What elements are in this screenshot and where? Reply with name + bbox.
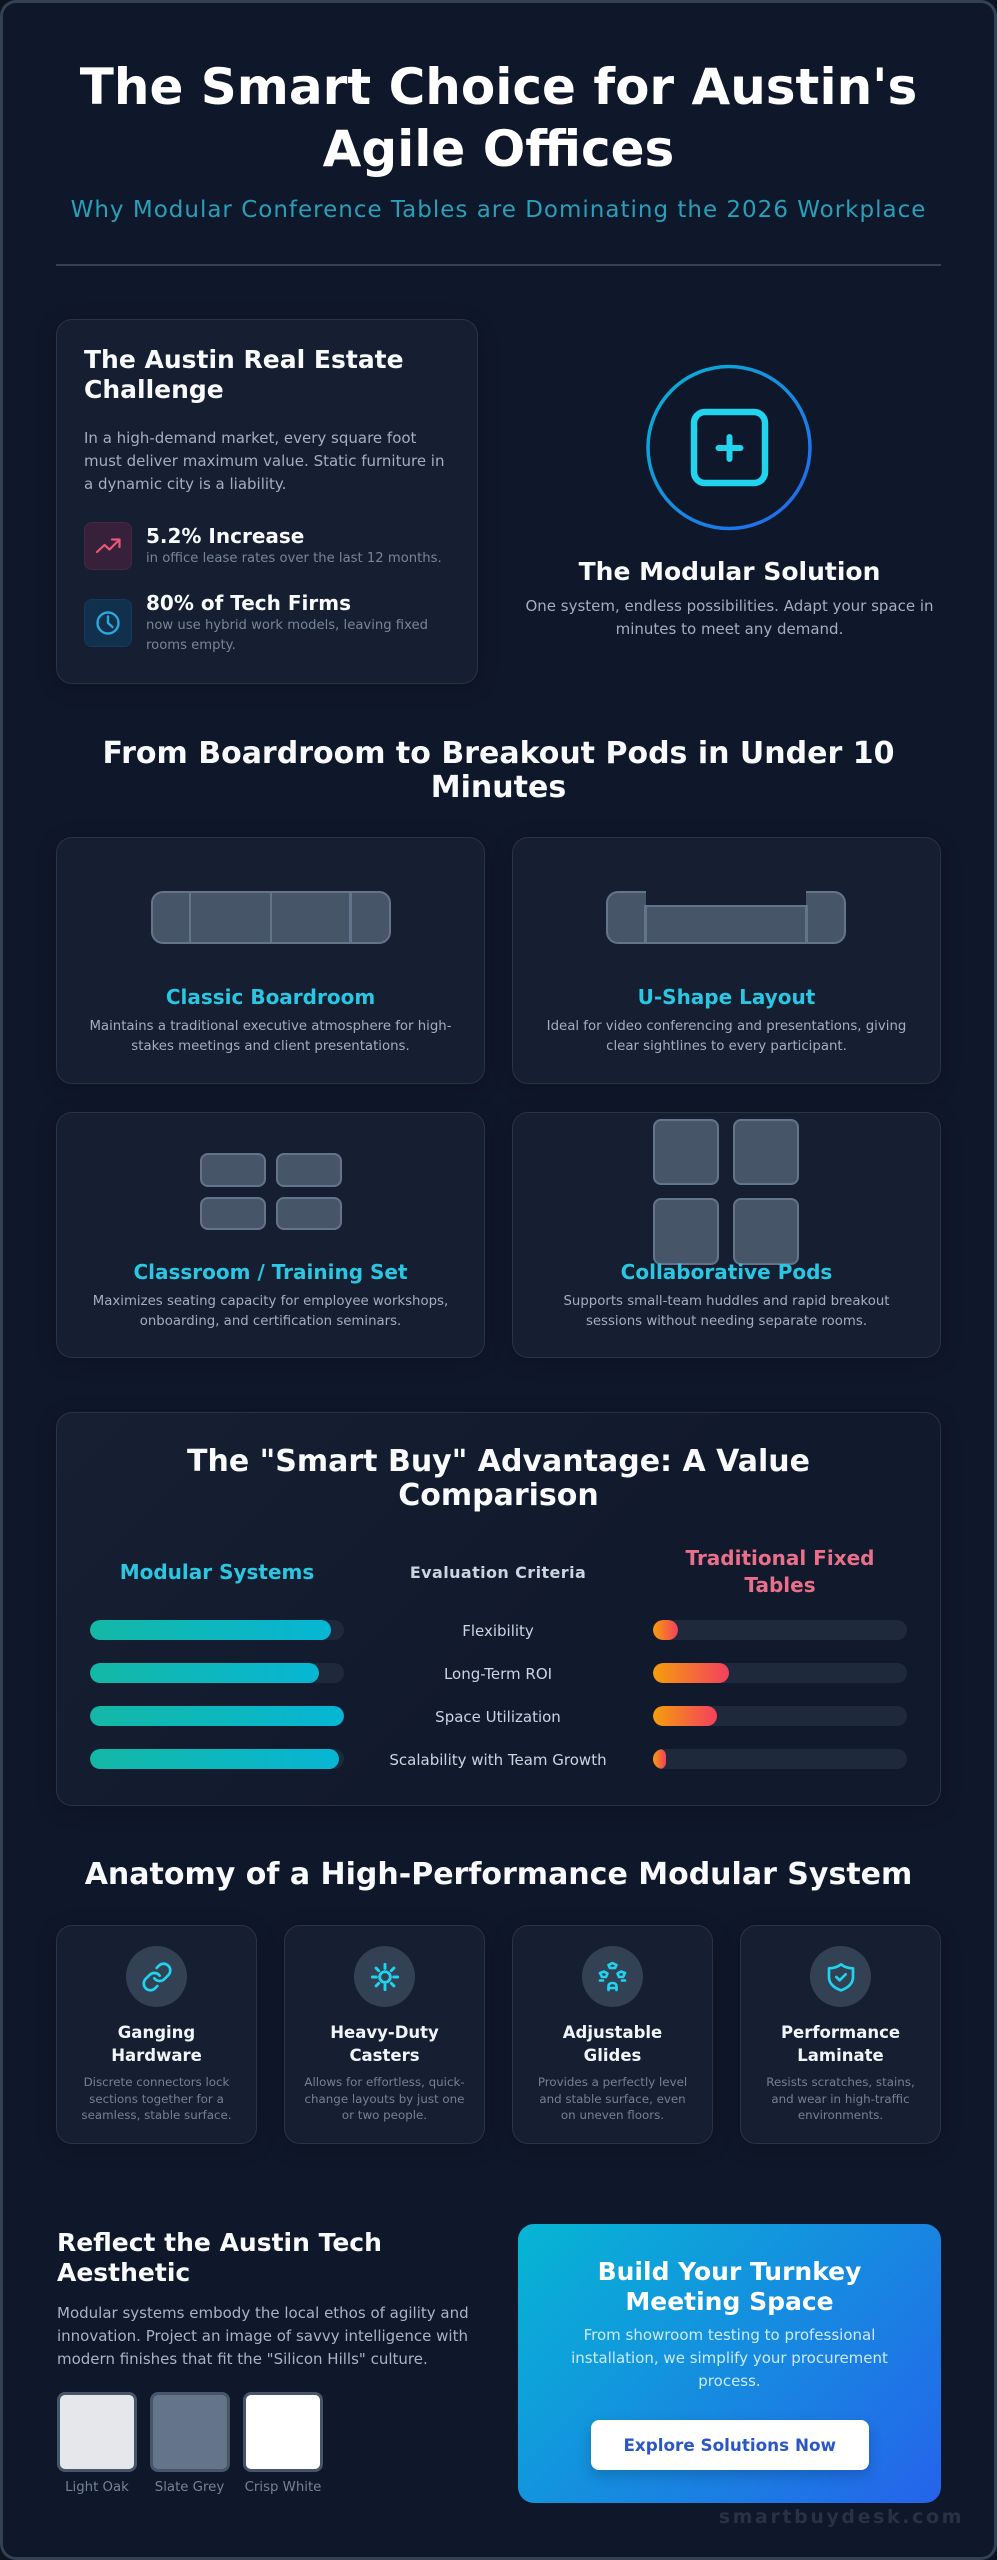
column header: traditional fixed tables [686,1546,874,1597]
layout title: Classroom / Training Set [133,1260,408,1284]
text: challenge description: must deliver maximum value. Static furniture in [84,452,444,470]
feature title [781,2023,900,2065]
feature title: Hardware [111,2046,202,2065]
layout title: Classic Boardroom [166,985,375,1009]
feature description: Allows for effortless, quick- [304,2075,465,2089]
heading: smart buy advantage: The "Smart Buy" Advantage: A Value [187,1444,810,1479]
icon: sun [354,1946,415,2007]
feature title [330,2023,439,2065]
swatch: crisp white [243,2392,323,2472]
layout description: onboarding, and certification seminars. [140,1314,401,1329]
feature title [562,2023,662,2065]
text: challenge description [84,428,444,493]
panel: ganging hardware [56,1925,257,2144]
column header: traditional fixed tables: Tables [744,1573,816,1597]
label: slate grey: Slate Grey [155,2480,224,2495]
icon: trending up [84,522,132,570]
text: aesthetic description [57,2304,469,2368]
heading: turnkey meeting space: Build Your Turnkey [598,2257,861,2286]
feature description: Discrete connectors lock [84,2075,229,2089]
feature description: Provides a perfectly level [538,2075,687,2089]
feature title: Heavy-Duty [330,2023,439,2042]
feature description: sections together for a [89,2092,224,2106]
feature description: and stable surface, even [539,2092,686,2106]
layout description [89,1019,452,1054]
diagram: classroom tables [200,1153,342,1230]
feature description: seamless, stable surface. [81,2108,232,2122]
icon: shield check [810,1946,871,2007]
feature description [766,2075,915,2122]
feature title: Glides [584,2046,641,2065]
layout description: sessions without needing separate rooms. [586,1314,867,1329]
swatch: slate grey [150,2392,230,2472]
heading: boardroom to breakout [103,736,894,805]
row: space utilization: Space Utilization [435,1708,561,1726]
layout description: clear sightlines to every participant. [606,1039,847,1054]
layout description: Supports small-team huddles and rapid breakout [563,1294,890,1309]
feature description: environments. [798,2108,883,2122]
layout description: Maximizes seating capacity for employee workshops, [93,1294,448,1309]
column header: modular systems: Modular Systems [120,1560,314,1584]
row: scalability: Scalability with Team Growth [389,1751,607,1769]
panel: Austin real estate challenge [56,319,478,684]
panel: adjustable glides [512,1925,713,2144]
swatch: light oak [57,2392,137,2472]
title: The Smart Choice for Austin's [80,58,917,116]
row: space utilization [90,1706,907,1726]
panel: u-shape layout [512,837,941,1084]
panel: collaborative pods [512,1112,941,1358]
text: challenge description: a dynamic city is a liability. [84,475,286,493]
layout title: Collaborative Pods [621,1260,832,1284]
layout description [563,1294,890,1329]
heading: reflect the Austin tech aesthetic: Reflect the Austin Tech [57,2228,382,2257]
row: scalability [90,1749,907,1769]
text: cta description: installation, we simplify your procurement [571,2349,888,2367]
feature description: or two people. [342,2108,427,2122]
feature title: Adjustable [563,2023,662,2042]
icon: clock [84,599,132,647]
feature description: change layouts by just one [305,2092,464,2106]
text: cta description: process. [698,2372,761,2390]
column header: evaluation criteria: Evaluation Criteria [410,1563,586,1582]
feature description [538,2075,687,2122]
row: flexibility: Flexibility [462,1622,534,1640]
stat: lease increase heading: 5.2% Increase [146,524,304,548]
text: aesthetic description: Modular systems embody the local ethos of agility and [57,2304,469,2322]
heading: modular solution: The Modular Solution [579,557,880,586]
finish swatches [57,2392,323,2495]
button: explore solutions: Explore Solutions Now [623,2435,836,2455]
heading: anatomy: Anatomy of a High-Performance Modular System [85,1857,912,1892]
heading: turnkey meeting space [598,2257,861,2316]
text: modular solution description: minutes to meet any demand. [616,620,843,638]
row: long-term ROI [90,1663,907,1683]
panel: classic boardroom [56,837,485,1084]
feature title: Ganging [118,2023,195,2042]
stat: tech firms detail: rooms empty. [146,638,236,653]
heading: smart buy advantage [187,1444,810,1513]
subtitle: Why Modular Conference Tables are Dominating the 2026 Workplace [71,197,926,223]
layout title: U-Shape Layout [638,985,815,1009]
panel: classroom training set [56,1112,485,1358]
row: long-term ROI: Long-Term ROI [444,1665,552,1683]
heading: reflect the Austin tech aesthetic: Aesthetic [57,2258,190,2287]
label: light oak: Light Oak [65,2480,129,2495]
feature description: Resists scratches, stains, [766,2075,915,2089]
icon: glides [582,1946,643,2007]
header divider [56,264,941,266]
text: challenge description: In a high-demand market, every square foot [84,428,416,446]
stat: tech firms heading: 80% of Tech Firms [146,591,351,615]
stat: tech firms detail [146,618,428,653]
feature title: Casters [349,2046,420,2065]
stat: tech firms detail: now use hybrid work models, leaving fixed [146,618,428,633]
layout description: Maintains a traditional executive atmosphere for high- [89,1019,452,1034]
layout description [93,1294,448,1329]
label: crisp white: Crisp White [245,2480,321,2495]
heading: challenge: Challenge [84,375,224,404]
panel: value comparison [56,1412,941,1806]
row: flexibility [90,1620,907,1640]
column header: traditional fixed tables: Traditional Fixed [686,1546,874,1570]
heading: smart buy advantage: Comparison [398,1478,599,1513]
layout description: Ideal for video conferencing and presentations, giving [547,1019,906,1034]
panel: heavy-duty casters [284,1925,485,2144]
heading: challenge [84,345,404,404]
feature description [81,2075,232,2122]
button: explore solutions [591,2420,868,2470]
text: modular solution description [525,597,934,638]
heading: reflect the Austin tech aesthetic [57,2228,382,2287]
feature description [304,2075,465,2122]
text: modular solution description: One system, endless possibilities. Adapt your space in [525,597,934,615]
diagram: u-shape table [606,891,846,944]
feature title: Performance [781,2023,900,2042]
watermark: smartbuydesk.com [719,2506,964,2528]
icon: ring with plus square [646,364,812,530]
diagram: boardroom table [151,891,391,944]
text: aesthetic description: innovation. Project an image of savvy intelligence with [57,2327,468,2345]
layout description: stakes meetings and client presentations. [131,1039,410,1054]
feature title [111,2023,202,2065]
text: aesthetic description: modern finishes that fit the "Silicon Hills" culture. [57,2350,428,2368]
stat: lease increase detail: in office lease rates over the last 12 months. [146,551,442,566]
feature description: on uneven floors. [561,2108,664,2122]
diagram: pod tables [653,1119,799,1265]
feature description: and wear in high-traffic [771,2092,910,2106]
text: cta description [571,2326,888,2390]
layout description [547,1019,906,1054]
feature title: Laminate [797,2046,884,2065]
panel: performance laminate [740,1925,941,2144]
heading: boardroom to breakout: From Boardroom to Breakout Pods in Under 10 [103,736,894,771]
icon: link [126,1946,187,2007]
heading: challenge: The Austin Real Estate [84,345,404,374]
title: Agile Offices [323,120,674,178]
text: cta description: From showroom testing to professional [584,2326,875,2344]
title [80,58,917,178]
panel: call to action [518,2224,941,2503]
heading: turnkey meeting space: Meeting Space [625,2287,834,2316]
heading: boardroom to breakout: Minutes [431,770,566,805]
panel: modular solution [525,364,934,638]
